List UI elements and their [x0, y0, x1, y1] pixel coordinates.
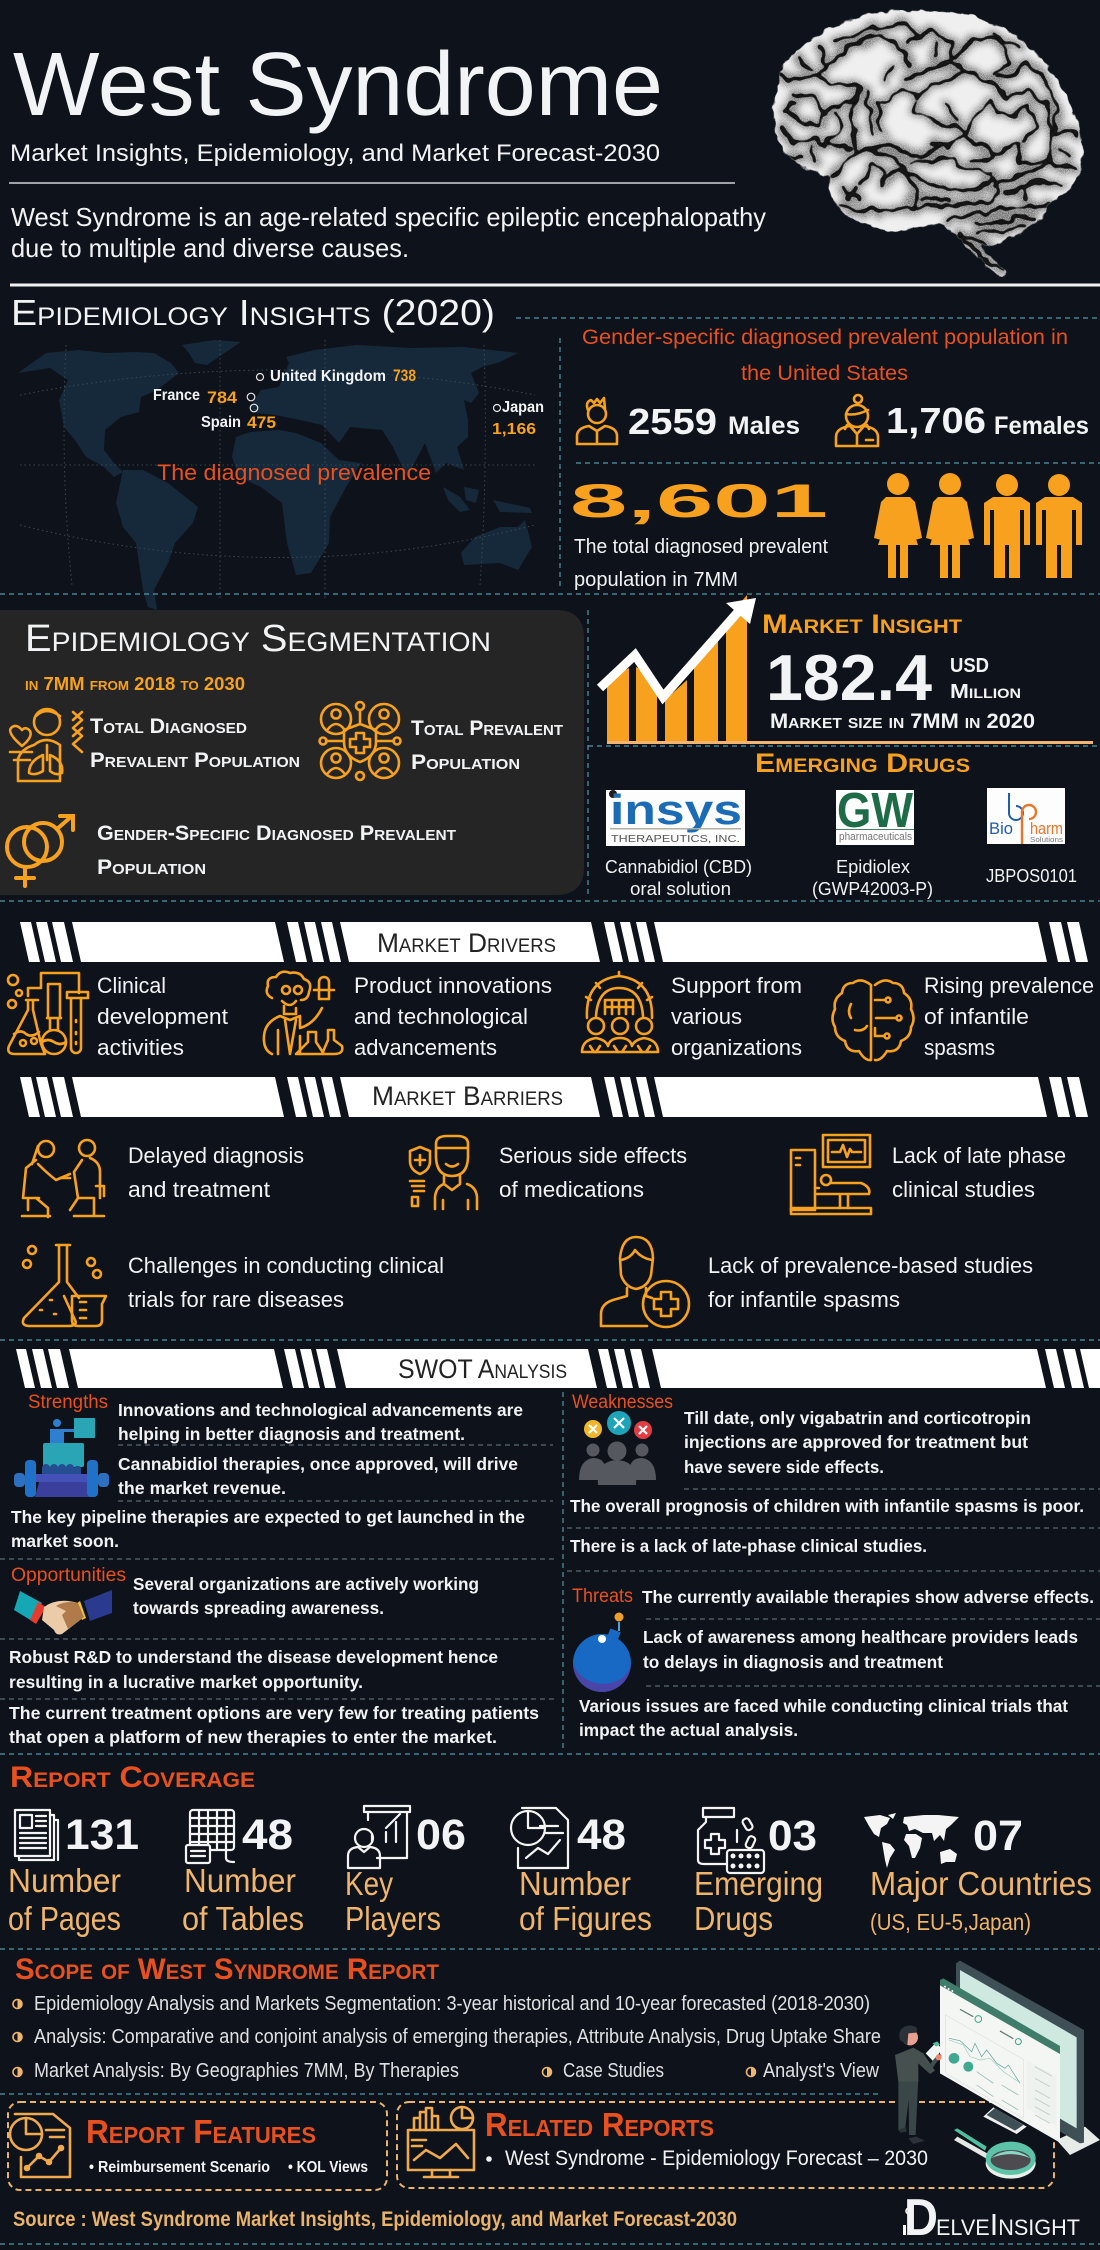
logo: GW Pharmaceuticals: pharmaceuticals	[839, 831, 912, 843]
coverage: major countries	[864, 1812, 1092, 1935]
panel: strengths: Strengths	[28, 1392, 108, 1413]
scope list: Market Analysis: By Geographies 7MM, By Therapies	[34, 2060, 459, 2082]
panel: opportunities: The current treatment options are very few for treating patients	[9, 1703, 539, 1723]
banner: market drivers: Market Drivers	[377, 928, 556, 958]
icon: strengths	[14, 1418, 109, 1497]
barrier: prevalence-based studies	[601, 1237, 1033, 1327]
icon: four people	[874, 473, 1082, 578]
coverage: pages	[8, 1810, 139, 1937]
label: total prevalent population: Population	[411, 751, 520, 774]
stat: females	[886, 400, 1089, 441]
driver: clinical development: development	[97, 1004, 228, 1029]
map label: Spain	[201, 404, 276, 432]
logo: DelveInsight: D	[904, 2189, 938, 2247]
stat: market size	[766, 641, 1035, 733]
icon: diagnosis figure	[10, 709, 82, 781]
label: total diagnosed prevalent population: Total Diagnosed	[90, 715, 247, 738]
driver: support from organizations: organizations	[671, 1035, 802, 1060]
coverage: key players	[345, 1806, 466, 1937]
coverage: emerging drugs: Emerging	[694, 1865, 823, 1902]
coverage: major countries: (US, EU-5,Japan)	[870, 1909, 1031, 1935]
panel: opportunities: Opportunities	[11, 1565, 126, 1586]
coverage: tables	[182, 1810, 304, 1937]
subtitle: Market Insights, Epidemiology, and Market Forecast-2030	[10, 140, 660, 167]
coverage: key players: 06	[416, 1811, 466, 1859]
map label: United Kingdom: United Kingdom	[270, 368, 386, 385]
panel: strengths: market soon.	[11, 1531, 119, 1551]
icon: male	[577, 398, 617, 444]
icon: related report chart	[408, 2107, 474, 2177]
driver: rising prevalence: of infantile	[924, 1004, 1029, 1029]
coverage: tables: Number	[184, 1862, 296, 1899]
coverage: tables: 48	[242, 1811, 293, 1859]
barrier: challenges in trials: Challenges in conducting clinical	[128, 1253, 444, 1278]
driver: product innovations: advancements	[354, 1035, 497, 1060]
coverage: major countries: Major Countries	[870, 1865, 1092, 1902]
label: gender-specific population: Gender-Specific Diagnosed Prevalent	[97, 822, 456, 845]
drug names: JBPOS0101	[986, 866, 1077, 886]
heading: market insight: Market Insight	[762, 609, 962, 639]
stat: males	[628, 401, 800, 442]
icon: weaknesses	[579, 1411, 656, 1485]
panel: epidemiology segmentation	[0, 610, 584, 895]
coverage: figures: Number	[519, 1865, 631, 1902]
driver: product innovations: and technological	[354, 1004, 528, 1029]
panel: strengths: The key pipeline therapies are expected to get launched in the	[11, 1507, 525, 1527]
logo: BioPharm Solutions: harm	[1030, 819, 1063, 838]
barrier: side effects	[410, 1136, 687, 1209]
barrier: delayed diagnosis: and treatment	[128, 1177, 270, 1202]
heading: emerging drugs: Emerging Drugs	[755, 748, 970, 778]
heading: gender-specific population: Gender-specific diagnosed prevalent population in	[582, 326, 1068, 349]
stat: market size: Market size in 7MM in 2020	[770, 710, 1035, 733]
map label: Japan	[492, 399, 544, 438]
stat: males: Males	[728, 412, 800, 440]
map label: Japan: Japan	[502, 399, 544, 416]
icon: brain illustration	[773, 10, 1083, 277]
panel: weaknesses: The overall prognosis of children with infantile spasms is poor.	[570, 1496, 1084, 1516]
panel: strengths	[11, 1392, 525, 1551]
coverage: key players: Key	[345, 1865, 393, 1902]
driver: rising prevalence: Rising prevalence	[924, 973, 1094, 998]
panel: opportunities: Several organizations are actively working	[133, 1574, 479, 1594]
coverage: major countries: 07	[973, 1812, 1023, 1860]
label: total prevalent population: Total Prevalent	[411, 717, 563, 740]
heading: scope of report: Scope of West Syndrome Report	[15, 1953, 439, 1986]
map label: United Kingdom	[256, 366, 416, 385]
heading: gender-specific population: the United States	[741, 362, 908, 385]
barrier: late phase studies	[791, 1135, 1066, 1214]
panel: related reports: West Syndrome - Epidemiology Forecast – 2030	[505, 2147, 928, 2170]
panel: threats: to delays in diagnosis and treatment	[643, 1652, 943, 1672]
panel: report features	[8, 2102, 387, 2190]
icon: bomb	[573, 1612, 631, 1692]
heading: epidemiology insights: Epidemiology Insights (2020)	[11, 292, 495, 333]
panel: opportunities: towards spreading awareness.	[133, 1598, 384, 1618]
panel: threats: Various issues are faced while conducting clinical trials that	[579, 1696, 1068, 1716]
logo: BioPharm Solutions: Solutions	[1030, 835, 1063, 844]
logo: Insys Therapeutics	[606, 786, 745, 846]
driver: support from organizations: various	[671, 1004, 742, 1029]
panel: weaknesses: have severe side effects.	[684, 1457, 884, 1477]
barrier: late phase studies: Lack of late phase	[892, 1143, 1066, 1168]
barrier: challenges in trials: trials for rare diseases	[128, 1287, 344, 1312]
banner: SWOT analysis: SWOT Analysis	[398, 1354, 567, 1384]
map label: United Kingdom: 738	[393, 366, 416, 385]
map label: France	[153, 387, 255, 407]
coverage: key players: Players	[345, 1900, 441, 1937]
map grid	[20, 340, 535, 600]
panel: threats: The currently available therapies show adverse effects.	[642, 1587, 1094, 1607]
stat: total population: 8,601	[570, 474, 828, 527]
coverage: figures: of Figures	[519, 1900, 652, 1937]
coverage: emerging drugs	[694, 1808, 823, 1937]
panel: opportunities: resulting in a lucrative market opportunity.	[9, 1672, 363, 1692]
map label: Japan: 1,166	[492, 421, 536, 438]
barrier: side effects: Serious side effects	[499, 1143, 687, 1168]
map caption: The diagnosed prevalence	[157, 460, 431, 485]
coverage: emerging drugs: Drugs	[694, 1900, 773, 1937]
stat: market size: USD	[950, 655, 989, 677]
scope list: Analyst's View	[763, 2060, 880, 2082]
driver: product innovations	[264, 972, 552, 1060]
map label: Spain: 475	[247, 413, 276, 432]
driver: rising prevalence: spasms	[924, 1035, 995, 1060]
panel: related reports: Related Reports	[485, 2106, 714, 2143]
logo: Insys Therapeutics: insys	[610, 786, 742, 833]
panel: weaknesses: There is a lack of late-phase clinical studies.	[570, 1536, 927, 1556]
panel heading: Epidemiology Segmentation	[25, 618, 491, 660]
driver: clinical development: activities	[97, 1035, 184, 1060]
stat: males: 2559	[628, 401, 717, 442]
map label: France: France	[153, 387, 200, 404]
map label: Spain: Spain	[201, 414, 241, 431]
panel: related reports	[397, 2102, 1054, 2188]
barrier: delayed diagnosis: Delayed diagnosis	[128, 1143, 304, 1168]
heading: report coverage: Report Coverage	[10, 1761, 255, 1794]
driver: product innovations: Product innovations	[354, 973, 552, 998]
panel: threats: impact the actual analysis.	[579, 1720, 798, 1740]
coverage: pages: Number	[8, 1862, 121, 1899]
panel: strengths: the market revenue.	[118, 1478, 286, 1498]
banner: market barriers: Market Barriers	[372, 1081, 563, 1111]
panel: weaknesses: injections are approved for treatment but	[684, 1432, 1028, 1452]
barrier: late phase studies: clinical studies	[892, 1177, 1035, 1202]
logo: BioPharm Solutions: Bio	[989, 819, 1013, 838]
driver: clinical development	[8, 973, 228, 1060]
panel: opportunities: Robust R&D to understand the disease development hence	[9, 1647, 498, 1667]
map label: France: 784	[207, 388, 238, 407]
panel: weaknesses	[570, 1392, 1084, 1556]
intro text: due to multiple and diverse causes.	[11, 233, 409, 263]
panel: threats: Threats	[572, 1586, 633, 1607]
world map	[18, 340, 532, 610]
scope list: Epidemiology Analysis and Markets Segmentation: 3-year historical and 10-year forecasted (2018-2030)	[34, 1993, 870, 2015]
logo: DelveInsight	[903, 2189, 1080, 2247]
panel: strengths: Innovations and technological advancements are	[118, 1400, 523, 1420]
icon: female	[836, 395, 878, 446]
barrier: challenges in trials	[23, 1245, 444, 1326]
title: West Syndrome	[13, 35, 663, 135]
banner: market barriers	[20, 1077, 1088, 1117]
label: gender-specific population: Population	[97, 856, 206, 879]
coverage: pages: of Pages	[8, 1900, 121, 1937]
banner: market drivers	[20, 922, 1088, 962]
stat: total population	[570, 474, 828, 591]
drug names: oral solution	[630, 879, 731, 899]
stat: total population: The total diagnosed prevalent	[574, 536, 828, 558]
panel: threats: Lack of awareness among healthcare providers leads	[643, 1627, 1078, 1647]
panel: threats	[572, 1586, 1094, 1740]
barrier: prevalence-based studies: for infantile spasms	[708, 1287, 900, 1312]
coverage: figures	[511, 1808, 652, 1937]
illustration: analyst with monitor	[895, 1961, 1100, 2179]
panel: report features: • Reimbursement Scenario	[89, 2159, 270, 2176]
driver: rising prevalence	[832, 973, 1094, 1060]
panel: opportunities: that open a platform of new therapies to enter the market.	[9, 1727, 497, 1747]
panel: weaknesses: Weaknesses	[572, 1392, 673, 1413]
coverage: emerging drugs: 03	[768, 1812, 817, 1860]
logo: DelveInsight: elveInsight	[936, 2207, 1080, 2242]
panel: weaknesses: Till date, only vigabatrin and corticotropin	[684, 1408, 1031, 1428]
drug names: Epidiolex	[836, 857, 910, 877]
icon: gender symbols	[7, 816, 73, 886]
icon: report	[10, 2114, 70, 2177]
label: total diagnosed prevalent population: Prevalent Population	[90, 749, 300, 772]
scope list: Analysis: Comparative and conjoint analysis of emerging therapies, Attribute Analysis, Drug Uptake Share	[34, 2026, 881, 2048]
panel: report features: Report Features	[86, 2113, 316, 2150]
source line: Source : West Syndrome Market Insights, Epidemiology, and Market Forecast-2030	[13, 2208, 737, 2231]
chart: market growth bars and arrow	[600, 595, 1093, 744]
scope list	[13, 1993, 881, 2082]
intro text	[11, 202, 766, 263]
barrier: side effects: of medications	[499, 1177, 644, 1202]
panel: strengths: helping in better diagnosis and treatment.	[118, 1424, 465, 1444]
panel: strengths: Cannabidiol therapies, once approved, will drive	[118, 1454, 518, 1474]
heading: gender-specific population	[582, 326, 1068, 385]
driver: clinical development: Clinical	[97, 973, 166, 998]
label: total diagnosed prevalent population	[90, 715, 300, 772]
logo: BioPharm Solutions	[987, 788, 1065, 844]
drug names: (GWP42003-P)	[812, 879, 933, 899]
coverage: tables: of Tables	[182, 1900, 304, 1937]
driver: support from organizations	[582, 972, 802, 1060]
panel: report features: • KOL Views	[288, 2159, 368, 2176]
logo: GW Pharmaceuticals: GW	[837, 784, 914, 838]
stat: market size: 182.4	[766, 641, 932, 714]
intro text: West Syndrome is an age-related specific epileptic encephalopathy	[11, 202, 766, 232]
label: gender-specific population	[97, 822, 456, 879]
stat: market size: Million	[950, 681, 1021, 703]
logo: Insys Therapeutics: THERAPEUTICS, INC.	[611, 833, 740, 845]
banner: SWOT analysis	[16, 1349, 1100, 1388]
coverage: pages: 131	[65, 1811, 139, 1859]
drug names: Cannabidiol (CBD)	[605, 857, 752, 877]
barrier: prevalence-based studies: Lack of prevalence-based studies	[708, 1253, 1033, 1278]
stat: total population: population in 7MM	[574, 569, 738, 591]
label: total prevalent population	[411, 717, 563, 774]
stat: females: 1,706	[886, 400, 986, 441]
drug names	[605, 857, 1077, 899]
driver: support from organizations: Support from	[671, 973, 802, 998]
scope list: Case Studies	[563, 2060, 664, 2082]
panel: opportunities	[9, 1565, 539, 1747]
icon: prevalent population	[320, 702, 400, 780]
coverage: figures: 48	[577, 1811, 626, 1859]
barrier: delayed diagnosis	[22, 1140, 304, 1217]
icon: handshake	[14, 1590, 112, 1634]
panel subheading: in 7MM from 2018 to 2030	[25, 674, 245, 694]
stat: females: Females	[994, 412, 1089, 440]
